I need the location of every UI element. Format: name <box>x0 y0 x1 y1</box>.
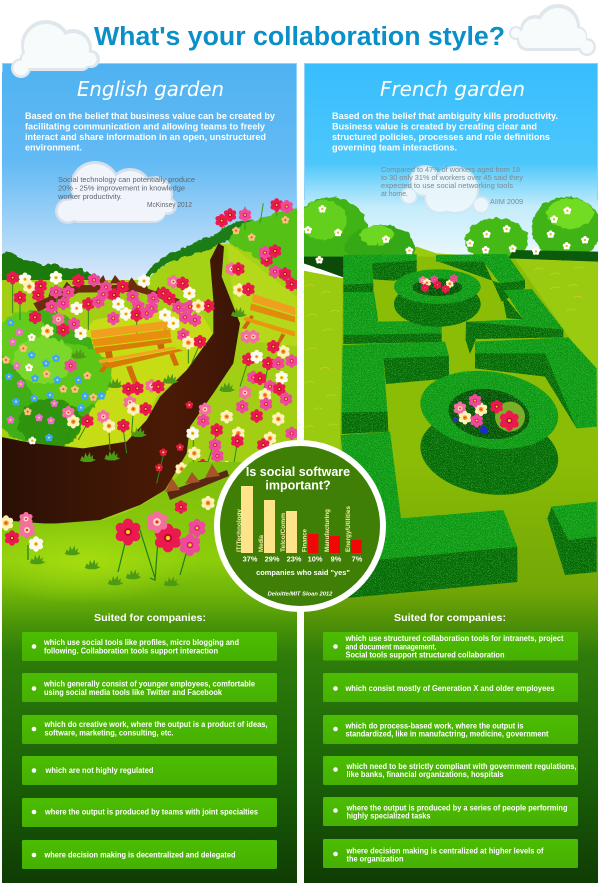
bar labels: Finance <box>302 529 308 552</box>
lawn and lower green section <box>2 490 297 883</box>
sky <box>304 63 598 263</box>
card list: English garden <box>22 632 277 869</box>
bar labels <box>236 506 352 552</box>
percentages: 9% <box>331 554 342 564</box>
text block: English garden belief: environment. <box>25 142 82 154</box>
text block: English garden belief: Based on the belief that business value can be created by <box>25 111 276 122</box>
card 3: which do creative work, where the output is a product of ideas, <box>44 720 268 729</box>
card 5: where the output is produced by teams with joint specialties <box>44 808 259 816</box>
chart title: Is social software <box>246 465 350 479</box>
hollyhocks stems <box>223 200 277 230</box>
hedge tops <box>341 254 597 561</box>
card 2: which generally consist of younger employees, comfortable <box>43 680 256 688</box>
bar labels: Manufacturing <box>324 509 331 552</box>
card 5: where the output is produced by a series of people performing <box>346 803 568 812</box>
quote: McKinsey: worker productivity. <box>57 192 122 201</box>
quote: AIIM: at home. <box>381 189 408 198</box>
card 1 <box>323 632 578 660</box>
cloud: top left <box>11 20 100 78</box>
title: What's your collaboration style? <box>94 23 505 51</box>
percentages: 23% <box>287 554 302 564</box>
text block: French garden belief: structured policies, processes and role definitions <box>332 132 550 143</box>
card 3 <box>22 715 277 744</box>
card 4: which are not highly regulated <box>45 766 154 775</box>
tufts <box>71 307 247 462</box>
quote: McKinsey: McKinsey 2012 <box>147 200 192 209</box>
foreground lawn and flowers <box>2 462 242 598</box>
percentages: 37% <box>243 554 258 564</box>
card 6 <box>323 839 578 868</box>
bar labels: Media <box>258 535 265 552</box>
planter bottom flowers <box>453 394 525 434</box>
card 4 <box>22 756 277 785</box>
cloud: English garden quote <box>55 161 177 224</box>
card 6: the organization <box>346 855 404 864</box>
card 6: where decision making is decentralized and delegated <box>44 850 236 860</box>
text block: French garden belief: Business value is created by creating clear and <box>332 122 537 132</box>
flower meadow <box>5 271 216 349</box>
panel top edges <box>2 64 598 200</box>
text block: English garden belief: facilitating communication and allowing teams to freely <box>25 122 266 132</box>
card 2 <box>22 673 277 702</box>
lawn tick marks <box>305 267 584 427</box>
heading: French garden: French garden <box>380 77 525 101</box>
chart title: important? <box>265 478 331 492</box>
sky <box>2 63 297 283</box>
text block: French garden belief: governing team interactions. <box>332 142 457 154</box>
card 6: where decision making is centralized at higher levels of <box>346 846 544 855</box>
bar labels: Energy/Utilities <box>345 506 352 552</box>
card 1: Social tools support structured collaboration <box>346 650 505 659</box>
card 4 <box>323 756 578 785</box>
text block: French garden belief <box>332 111 558 154</box>
bar chart <box>241 486 362 553</box>
left bench <box>91 321 183 384</box>
panel: French garden <box>292 63 600 883</box>
lower green section <box>304 556 598 883</box>
heading: suited for companies left: Suited for companies: <box>94 612 206 624</box>
card 5 <box>22 798 277 827</box>
maze scene <box>292 197 600 598</box>
card 4: like banks, financial organizations, hospitals <box>346 770 504 779</box>
quote: McKinsey: 20% - 25% improvement in knowledge <box>58 184 185 192</box>
percentages <box>243 554 363 564</box>
quote: McKinsey: Social technology can potentially produce <box>58 175 195 184</box>
cloud: French garden quote <box>400 165 490 214</box>
bar labels: Telco/Comm <box>280 513 287 552</box>
path <box>0 243 240 524</box>
card list: French garden <box>323 632 578 868</box>
quote: McKinsey <box>57 175 195 209</box>
heading: English garden: English garden <box>77 77 224 101</box>
bar labels: IT/Technology <box>236 509 243 552</box>
card 5: highly specialized tasks <box>346 811 431 820</box>
text block: French garden belief: Based on the belief that ambiguity kills productivity. <box>332 111 558 122</box>
bush blossoms <box>2 319 106 444</box>
card 2: using social media tools like Twitter and Facebook <box>44 688 223 697</box>
percentages: 7% <box>352 554 363 564</box>
planter top flowers <box>418 274 458 293</box>
right bench <box>242 294 295 347</box>
lawn <box>304 246 598 450</box>
card 1: and document management. <box>346 642 436 651</box>
chart source: Deloitte/MIT Sloan 2012 <box>268 592 333 598</box>
text block: English garden belief: interact and share information in an open, unstructured <box>25 132 266 143</box>
card 1 <box>22 632 277 661</box>
quote: AIIM: to 30 only 31% of workers over 45 said they <box>381 173 523 182</box>
hedge sides <box>342 259 597 598</box>
garden scene <box>0 198 300 524</box>
quote: AIIM: AIIM 2009 <box>490 197 523 206</box>
hollyhocks <box>214 198 299 291</box>
card 2: which consist mostly of Generation X and older employees <box>345 684 555 693</box>
heading: suited for companies right: Suited for companies: <box>394 612 506 624</box>
percentages: 10% <box>308 554 323 564</box>
card 3: software, marketing, consulting, etc. <box>44 728 174 738</box>
bushes <box>304 196 368 269</box>
quote: AIIM: expected to use social networking tools <box>381 181 513 190</box>
quote: AIIM: Compared to 47% of workers aged from 18 <box>381 165 520 174</box>
planter bottom <box>420 370 558 495</box>
chart badge: Is social software important <box>217 443 383 609</box>
card 1: which use structured collaboration tools for intranets, project <box>345 634 564 643</box>
card 3: which do process-based work, where the output is <box>345 722 524 731</box>
panel: English garden <box>0 63 300 883</box>
cloud: top right <box>509 4 596 56</box>
card 1: following. Collaboration tools support interaction <box>44 646 218 656</box>
planter top <box>394 269 481 327</box>
text block: English garden belief <box>25 111 276 154</box>
card 5 <box>323 797 578 826</box>
lower flowers <box>61 262 299 476</box>
chart caption: companies who said "yes" <box>256 568 350 577</box>
card 3 <box>323 715 578 744</box>
card 3: standardized, like in manufactring, medicine, government <box>346 730 549 739</box>
fence <box>33 275 180 312</box>
chart title <box>246 465 350 492</box>
percentages: 29% <box>265 554 280 564</box>
card 6 <box>22 840 277 869</box>
card 2 <box>323 673 578 702</box>
card 1: which use social tools like profiles, micro blogging and <box>43 638 239 647</box>
card 4: which need to be strictly compliant with government regulations, <box>346 762 576 771</box>
quote: AIIM <box>381 165 523 206</box>
stems <box>13 280 268 493</box>
